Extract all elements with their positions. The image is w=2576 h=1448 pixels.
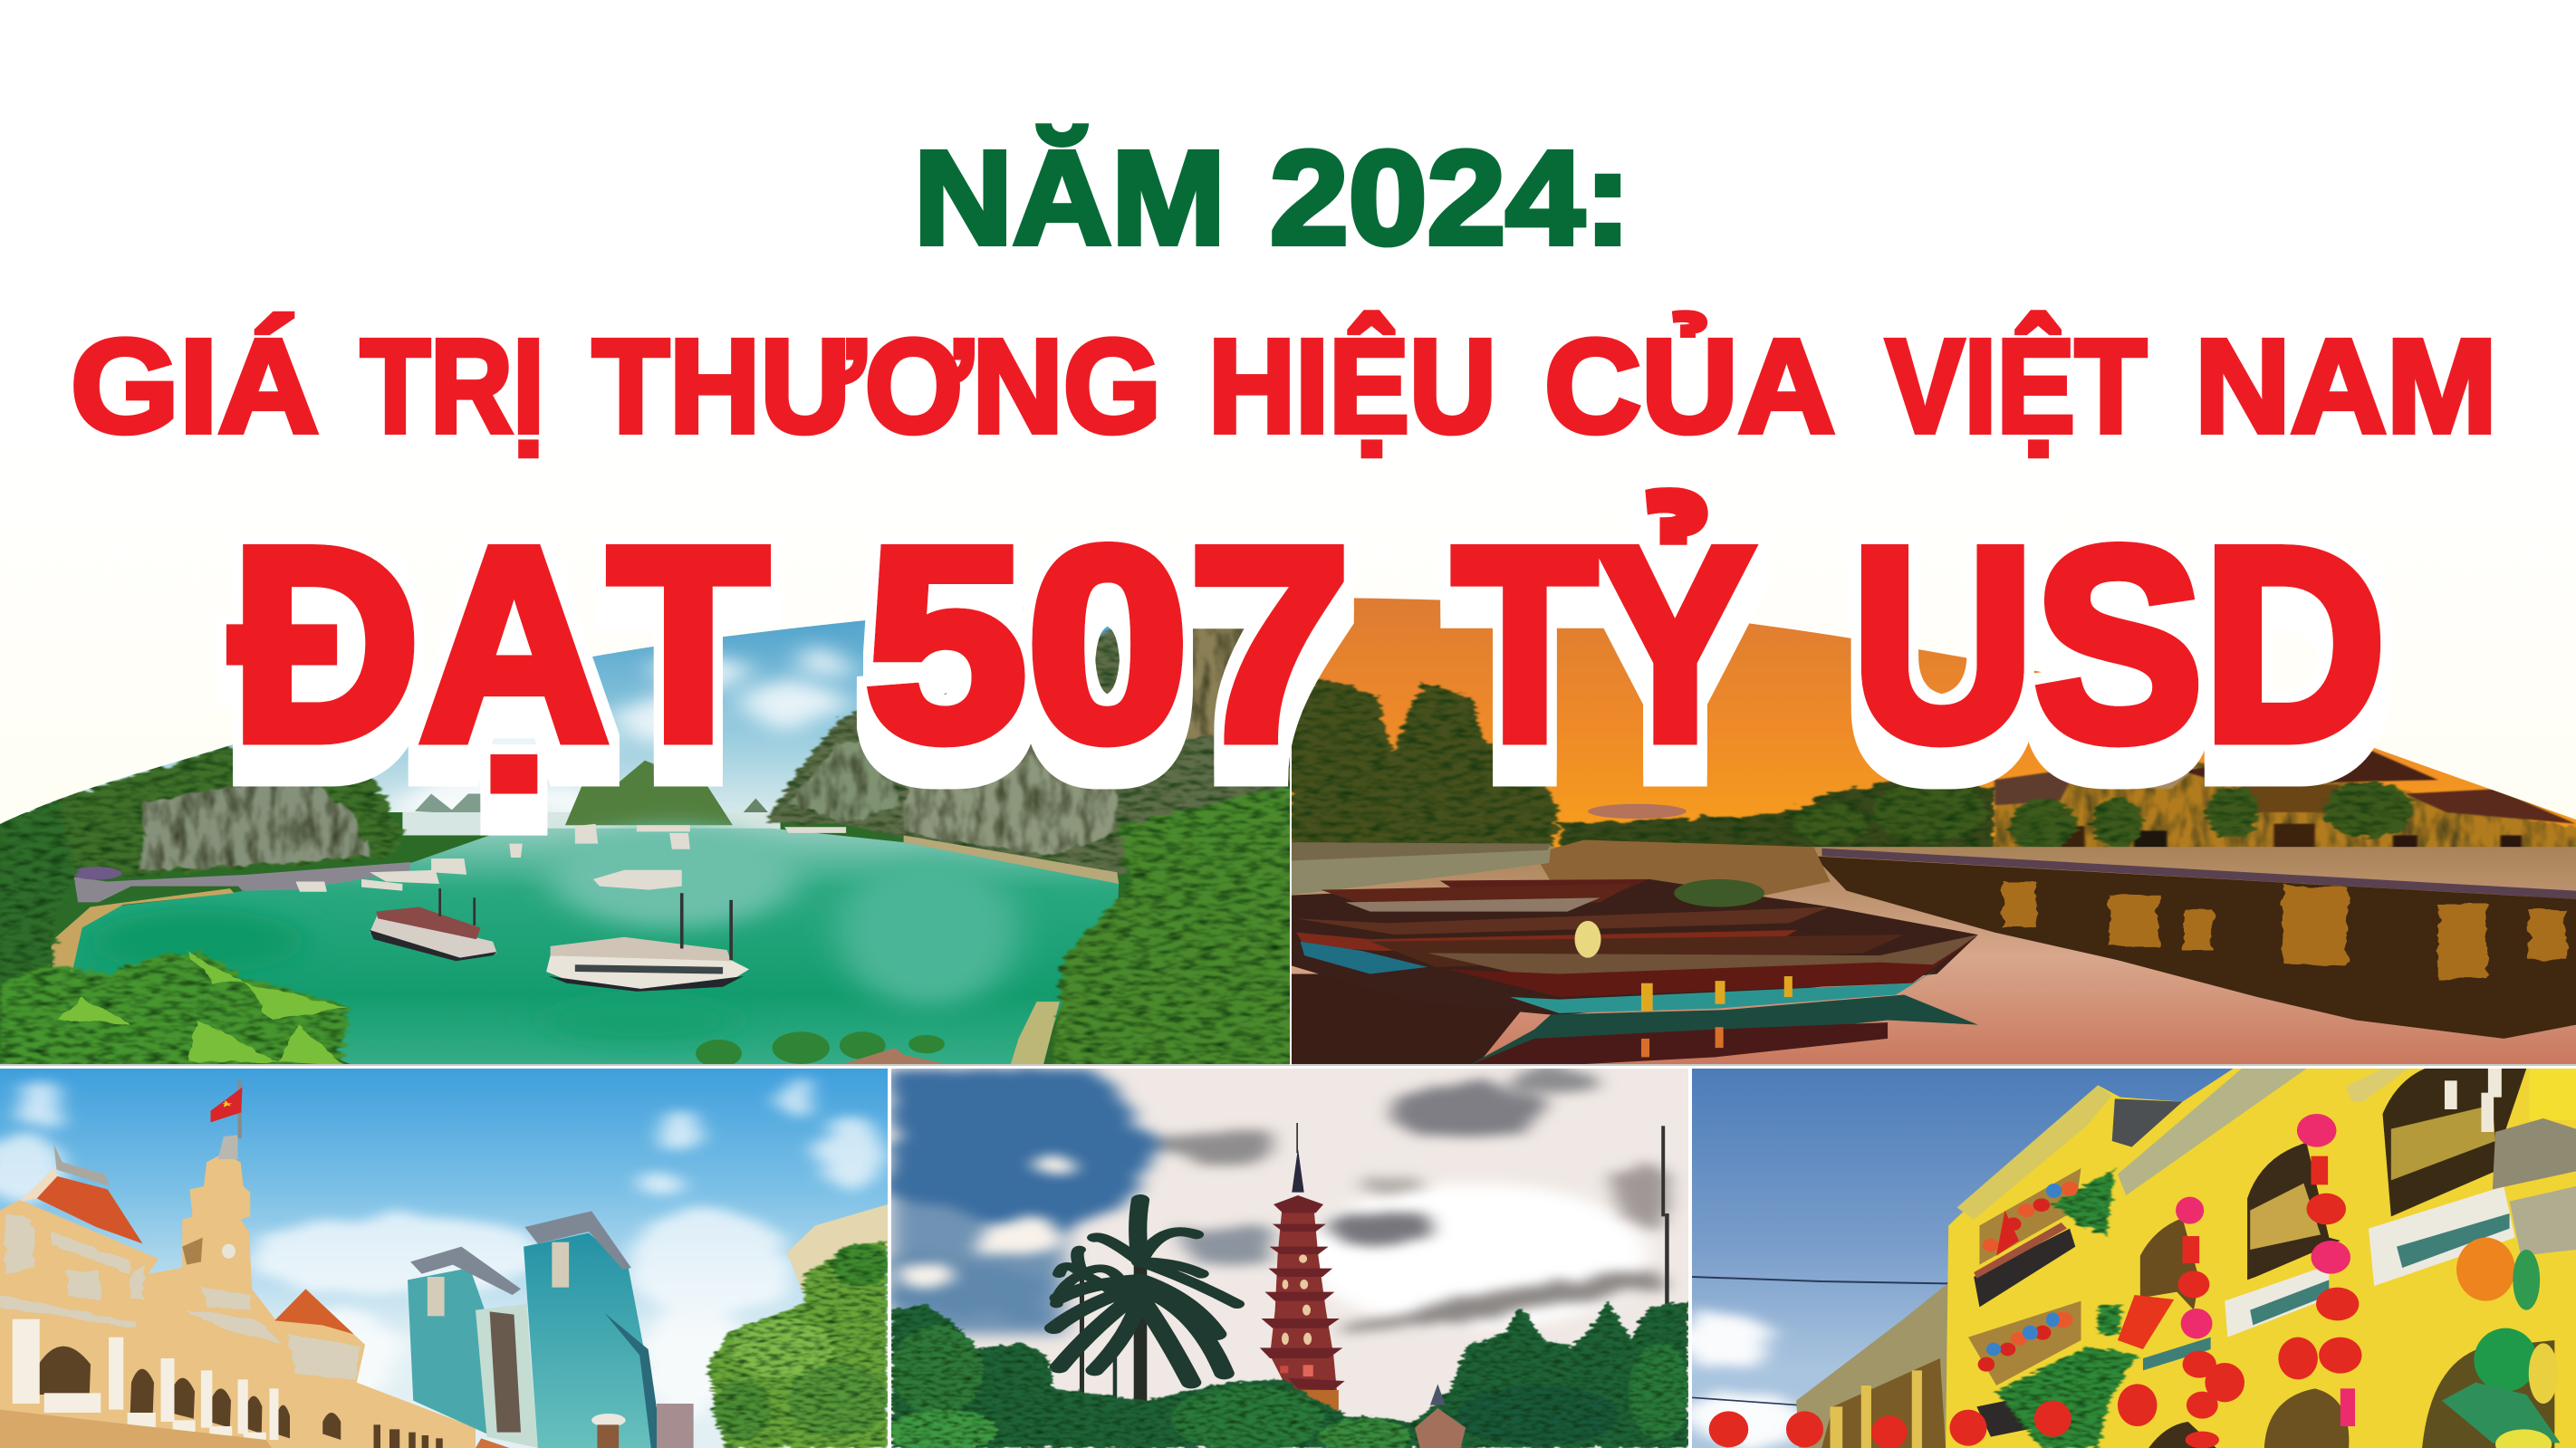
title line 3: ĐẠT 507 TỶ USD xyxy=(231,490,2386,798)
title line 2: GIÁ TRỊ THƯƠNG HIỆU CỦA VIỆT NAM: VIỆT xyxy=(1886,312,2147,461)
boat: large white cruise xyxy=(546,893,749,992)
flag xyxy=(210,1080,243,1138)
title line 2: GIÁ TRỊ THƯƠNG HIỆU CỦA VIỆT NAM: CỦA xyxy=(1544,312,1835,461)
wooden boats xyxy=(1288,879,1978,1066)
glass towers xyxy=(408,1211,694,1448)
title line 1: NĂM 2024: NĂM xyxy=(914,124,1226,273)
flag xyxy=(2118,1295,2174,1349)
small stupa xyxy=(1415,1384,1466,1448)
title line 3: ĐẠT 507 TỶ USD: TỶ xyxy=(1453,490,1754,798)
trees xyxy=(886,1301,1689,1448)
lower arches xyxy=(2264,1388,2349,1448)
title line 2: GIÁ TRỊ THƯƠNG HIỆU CỦA VIỆT NAM: GIÁ xyxy=(71,312,319,461)
palm trees xyxy=(1054,1200,1237,1448)
yellow building xyxy=(1946,1069,2576,1448)
title line 2: GIÁ TRỊ THƯƠNG HIỆU CỦA VIỆT NAM: NAM xyxy=(2195,312,2497,461)
boat: white cruise with red roof xyxy=(370,888,497,961)
title line 2: GIÁ TRỊ THƯƠNG HIỆU CỦA VIỆT NAM: HIỆU xyxy=(1208,312,1496,461)
photo: Ho Chi Minh City Hall and towers xyxy=(0,1069,889,1448)
lower left building xyxy=(1796,1283,1963,1448)
lanterns and blossoms xyxy=(1709,1069,2561,1448)
title line 2: GIÁ TRỊ THƯƠNG HIỆU CỦA VIỆT NAM: THƯƠNG xyxy=(592,312,1161,461)
upper arches xyxy=(2247,1143,2341,1280)
boats: small distant xyxy=(295,824,846,892)
city hall building xyxy=(0,1135,476,1448)
photo: Hoi An yellow houses with lanterns xyxy=(1677,1069,2576,1448)
title line 3: ĐẠT 507 TỶ USD: ĐẠT xyxy=(231,492,768,798)
title line 3: ĐẠT 507 TỶ USD: 507 xyxy=(865,492,1350,798)
title line 2: GIÁ TRỊ THƯƠNG HIỆU CỦA VIỆT NAM xyxy=(71,312,2497,461)
photo: Hoi An riverside at sunset xyxy=(1288,568,2576,1069)
grey column xyxy=(2493,1118,2576,1189)
photo: Ha Long Bay xyxy=(0,607,1290,1064)
balconies xyxy=(1979,1168,2081,1265)
title line 1: NĂM 2024: 2024: xyxy=(1270,124,1631,273)
vines xyxy=(1996,1168,2138,1448)
white panels xyxy=(2225,1265,2329,1338)
title line 2: GIÁ TRỊ THƯƠNG HIỆU CỦA VIỆT NAM: TRỊ xyxy=(360,312,544,461)
title line 1: NĂM 2024 xyxy=(914,124,1631,273)
photo: Tran Quoc pagoda xyxy=(886,1069,1689,1448)
tree and round building xyxy=(707,1204,889,1448)
photo separators xyxy=(0,598,2576,1448)
title line 3: ĐẠT 507 TỶ USD: USD xyxy=(1851,492,2386,798)
cyclist xyxy=(476,1414,626,1448)
pagoda tower xyxy=(1260,1123,1345,1422)
